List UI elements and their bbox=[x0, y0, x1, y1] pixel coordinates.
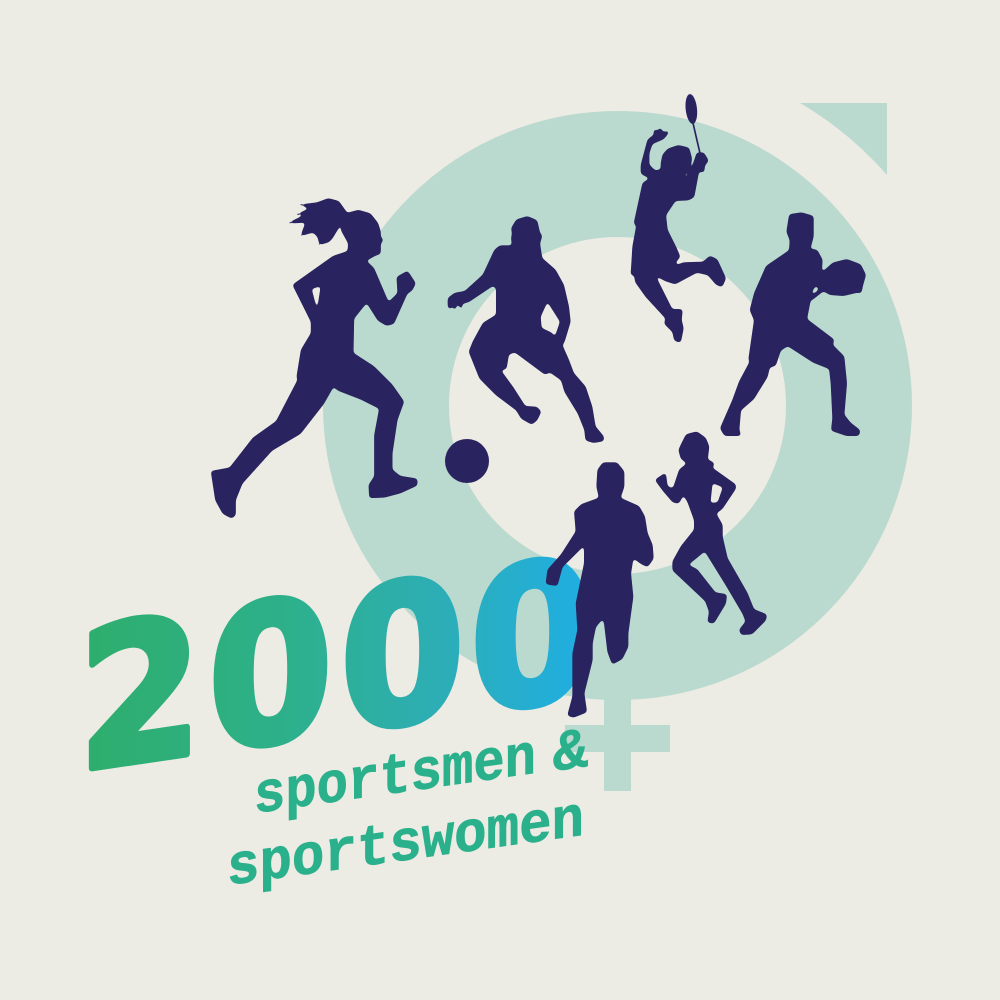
subheading: & bbox=[553, 717, 588, 789]
silhouette: two joggers bbox=[547, 432, 766, 717]
gender symbol background bbox=[386, 103, 887, 791]
silhouette: football player bbox=[448, 217, 603, 442]
athletes silhouettes bbox=[212, 93, 865, 717]
icon: badminton racket bbox=[684, 93, 700, 153]
subheading bbox=[227, 717, 588, 903]
subheading: sportswomen bbox=[227, 786, 584, 903]
silhouette: badminton and tennis players bbox=[632, 128, 865, 435]
subheading: sportsmen bbox=[254, 724, 536, 831]
ponytail strands bbox=[290, 205, 325, 244]
icon: football bbox=[445, 439, 489, 483]
silhouette: female runner with ponytail bbox=[212, 199, 417, 518]
heading number 2000: 2000 bbox=[78, 516, 595, 815]
